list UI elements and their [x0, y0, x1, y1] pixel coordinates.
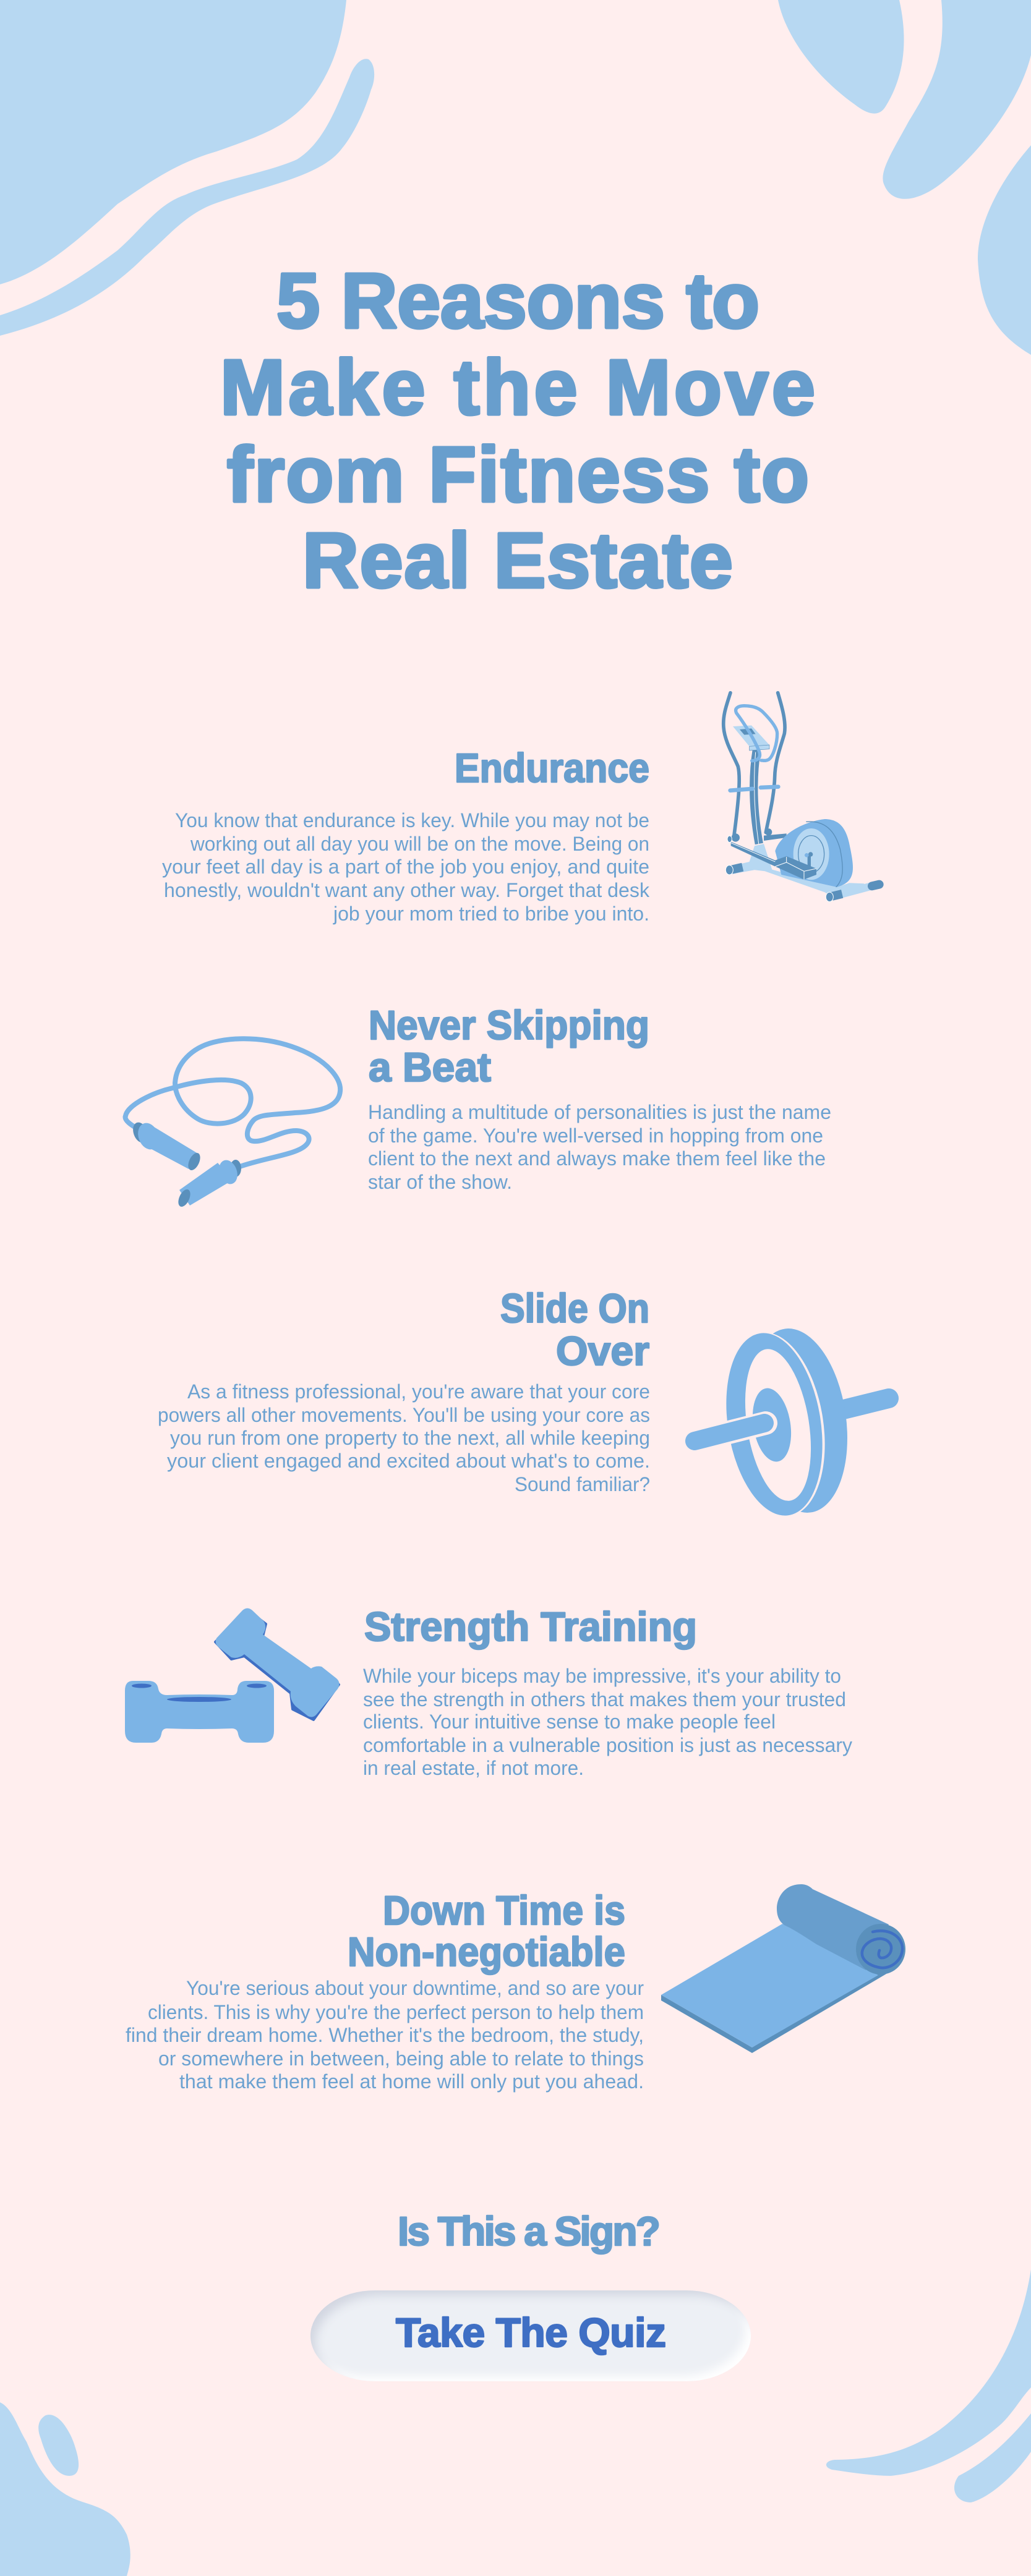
- text: endurance body: your feet all day is a part of the job you enjoy, and quite: [162, 856, 649, 878]
- text: endurance body: honestly, wouldn't want any other way. Forget that desk: [164, 879, 650, 901]
- text: endurance body: [162, 809, 650, 925]
- section: never skipping a beat: [126, 1002, 831, 1209]
- icon: elliptical machine: [724, 693, 879, 902]
- blobs: bottom left: [0, 2402, 130, 2576]
- text: never skipping body: of the game. You're well-versed in hopping from one: [368, 1124, 823, 1147]
- title: Real Estate: [302, 517, 733, 604]
- text: slide on over body: your client engaged and excited about what's to come.: [167, 1450, 650, 1472]
- blobs: bottom right: [826, 2269, 1031, 2502]
- heading: slide on over: Over: [556, 1328, 649, 1374]
- text: endurance body: You know that endurance is key. While you may not be: [175, 809, 649, 831]
- section: down time: [126, 1884, 905, 2093]
- button: take the quiz: [310, 2290, 751, 2381]
- icon: yoga mat: [661, 1884, 905, 2053]
- heading: down time is non-negotiable: Down Time is: [383, 1887, 625, 1933]
- text: down time body: or somewhere in between, being able to relate to things: [158, 2047, 644, 2070]
- title: 5 Reasons to: [276, 257, 759, 344]
- text: strength training body: in real estate, if not more.: [363, 1757, 584, 1779]
- heading: never skipping a beat: [369, 1002, 649, 1090]
- heading: strength training: Strength Training: [364, 1604, 697, 1649]
- heading: down time is non-negotiable: Non-negotiable: [348, 1929, 625, 1975]
- icon: dumbbells: [125, 1609, 340, 1743]
- text: never skipping body: Handling a multitude of personalities is just the name: [368, 1101, 831, 1123]
- blobs: top right: [778, 0, 1031, 355]
- text: down time body: You're serious about your downtime, and so are your: [186, 1977, 644, 1999]
- text: never skipping body: client to the next and always make them feel like the: [368, 1147, 826, 1170]
- text: slide on over body: you run from one property to the next, all while keeping: [170, 1427, 650, 1449]
- text: down time body: find their dream home. Whether it's the bedroom, the study,: [126, 2024, 644, 2046]
- section: strength training: [125, 1604, 852, 1779]
- text: strength training body: [363, 1665, 852, 1779]
- title: Make the Move: [220, 344, 815, 431]
- text: down time body: clients. This is why you're the perfect person to help them: [148, 2001, 644, 2023]
- text: never skipping body: [368, 1101, 831, 1193]
- text: endurance body: job your mom tried to bribe you into.: [333, 903, 649, 925]
- icon: jump rope: [126, 1039, 340, 1209]
- text: down time body: [126, 1977, 644, 2093]
- text: slide on over body: powers all other movements. You'll be using your core as: [158, 1404, 650, 1426]
- title: from Fitness to: [227, 431, 809, 518]
- heading: slide on over: [500, 1285, 649, 1374]
- heading: is this a sign: Is This a Sign?: [398, 2208, 661, 2254]
- text: strength training body: While your biceps may be impressive, it's your ability to: [363, 1665, 841, 1687]
- icon: ab wheel: [695, 1322, 889, 1523]
- text: slide on over body: As a fitness professional, you're aware that your core: [187, 1380, 650, 1403]
- text: strength training body: see the strength in others that makes them your trusted: [363, 1688, 846, 1711]
- text: slide on over body: Sound familiar?: [515, 1473, 650, 1495]
- heading: never skipping a beat: Never Skipping: [369, 1002, 649, 1048]
- text: down time body: that make them feel at home will only put you ahead.: [179, 2070, 644, 2093]
- text: never skipping body: star of the show.: [368, 1171, 512, 1193]
- heading: endurance: Endurance: [455, 745, 649, 791]
- heading: down time is non-negotiable: [348, 1887, 625, 1975]
- section: endurance: [162, 693, 879, 925]
- text: endurance body: working out all day you will be on the move. Being on: [190, 833, 649, 855]
- button label: Take The Quiz: [396, 2310, 666, 2355]
- heading: never skipping a beat: a Beat: [369, 1044, 491, 1090]
- title: [220, 257, 815, 604]
- heading: slide on over: Slide On: [500, 1285, 649, 1331]
- text: strength training body: comfortable in a vulnerable position is just as necessary: [363, 1734, 852, 1756]
- blobs: top left: [0, 0, 374, 336]
- text: strength training body: clients. Your intuitive sense to make people feel: [363, 1711, 776, 1733]
- text: slide on over body: [158, 1380, 650, 1495]
- section: slide on over: [158, 1285, 889, 1523]
